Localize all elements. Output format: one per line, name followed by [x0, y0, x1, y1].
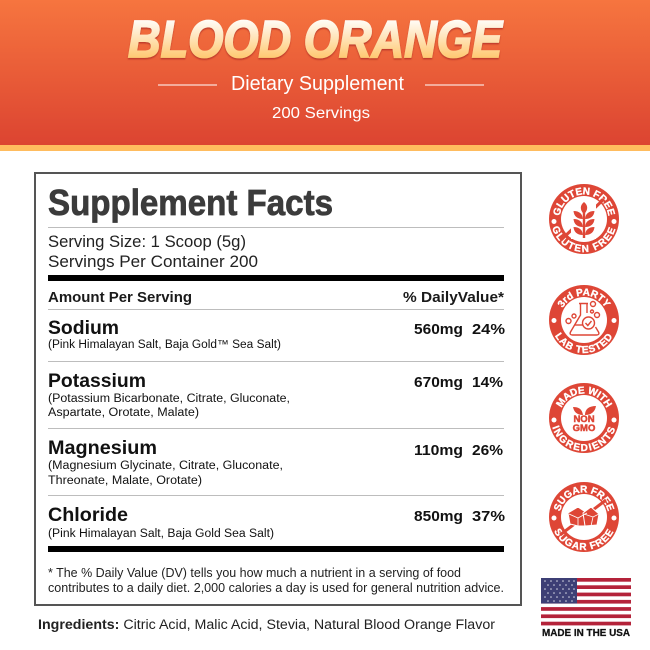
- row: magnesium: Magnesium: [48, 437, 157, 459]
- title: Blood Orange: BLOOD ORANGE: [128, 11, 503, 69]
- badge: sugar free: SUGAR FREE: [554, 528, 614, 550]
- badge: made with non gmo ingredients: MADE WITH: [556, 386, 612, 408]
- row: potassium: Aspartate, Orotate, Malate): [48, 407, 199, 419]
- row: chloride: [48, 504, 505, 540]
- badge: gluten free: GLUTEN FREE: [552, 226, 616, 252]
- row: sodium: [48, 317, 505, 351]
- servings count: 200 Servings: [272, 105, 370, 122]
- row: potassium: 670mg: [414, 374, 463, 391]
- flag: USA: [541, 578, 631, 626]
- footnote: contributes to a daily diet. 2,000 calories a day is used for general nutrition advice.: [48, 581, 504, 595]
- row: potassium: (Potassium Bicarbonate, Citrate, Gluconate,: [48, 393, 290, 405]
- badge: sugar free: SUGAR FREE: [554, 485, 614, 512]
- table header: Amount Per Serving: [48, 289, 192, 306]
- badge: sugar free: [549, 482, 619, 552]
- icon: flask: [566, 302, 600, 335]
- badge: gluten free: [549, 184, 619, 254]
- row: chloride: (Pink Himalayan Salt, Baja Gold Sea Salt): [48, 528, 274, 540]
- row: potassium: Potassium: [48, 370, 146, 392]
- icon: non gmo leaves: [573, 406, 596, 434]
- row: chloride: 850mg: [414, 508, 463, 525]
- heading: Supplement Facts: Supplement Facts: [48, 182, 333, 223]
- row: magnesium: 110mg: [414, 442, 463, 459]
- caption: made in the USA: MADE IN THE USA: [542, 628, 630, 639]
- row: sodium: 24%: [472, 321, 505, 338]
- table header: [48, 289, 504, 306]
- icon: non gmo leaves: GMO: [573, 423, 595, 434]
- row: chloride: 37%: [472, 508, 505, 525]
- badge: made with non gmo ingredients: INGREDIENTS: [552, 425, 615, 452]
- row: magnesium: [48, 437, 503, 487]
- serving info: [48, 233, 258, 271]
- row: magnesium: Threonate, Malate, Orotate): [48, 475, 202, 487]
- badge: gluten free: GLUTEN FREE: [553, 187, 616, 216]
- panel: supplement facts: [35, 173, 521, 605]
- badge: 3rd party lab tested: LAB TESTED: [554, 332, 612, 354]
- badge: 3rd party lab tested: [549, 285, 619, 355]
- serving info: Servings Per Container 200: [48, 253, 258, 271]
- badge: 3rd party lab tested: 3rd PARTY: [558, 288, 612, 308]
- row: chloride: Chloride: [48, 504, 128, 526]
- table header: % DailyValue*: [403, 289, 504, 306]
- footnote: * The % Daily Value (DV) tells you how much a nutrient in a serving of food: [48, 566, 461, 580]
- icon: sugar cubes: [560, 500, 606, 535]
- row: magnesium: 26%: [472, 442, 503, 459]
- row: sodium: 560mg: [414, 321, 463, 338]
- footnote: [48, 566, 504, 595]
- row: potassium: 14%: [472, 374, 503, 391]
- row: magnesium: (Magnesium Glycinate, Citrate, Gluconate,: [48, 460, 283, 472]
- icon: wheat: [561, 199, 604, 240]
- subtitle: Dietary Supplement: Dietary Supplement: [231, 73, 404, 95]
- ingredients: Ingredients: Citric Acid, Malic Acid, Stevia, Natural Blood Orange Flavor: [38, 617, 496, 632]
- badge: made with non gmo ingredients: [549, 383, 619, 453]
- header banner: [0, 0, 650, 151]
- row: sodium: Sodium: [48, 317, 119, 339]
- row: potassium: [48, 370, 503, 419]
- serving info: Serving Size: 1 Scoop (5g): [48, 233, 246, 251]
- icon: non gmo leaves: NON: [573, 414, 595, 425]
- row: sodium: (Pink Himalayan Salt, Baja Gold™ Sea Salt): [48, 339, 281, 351]
